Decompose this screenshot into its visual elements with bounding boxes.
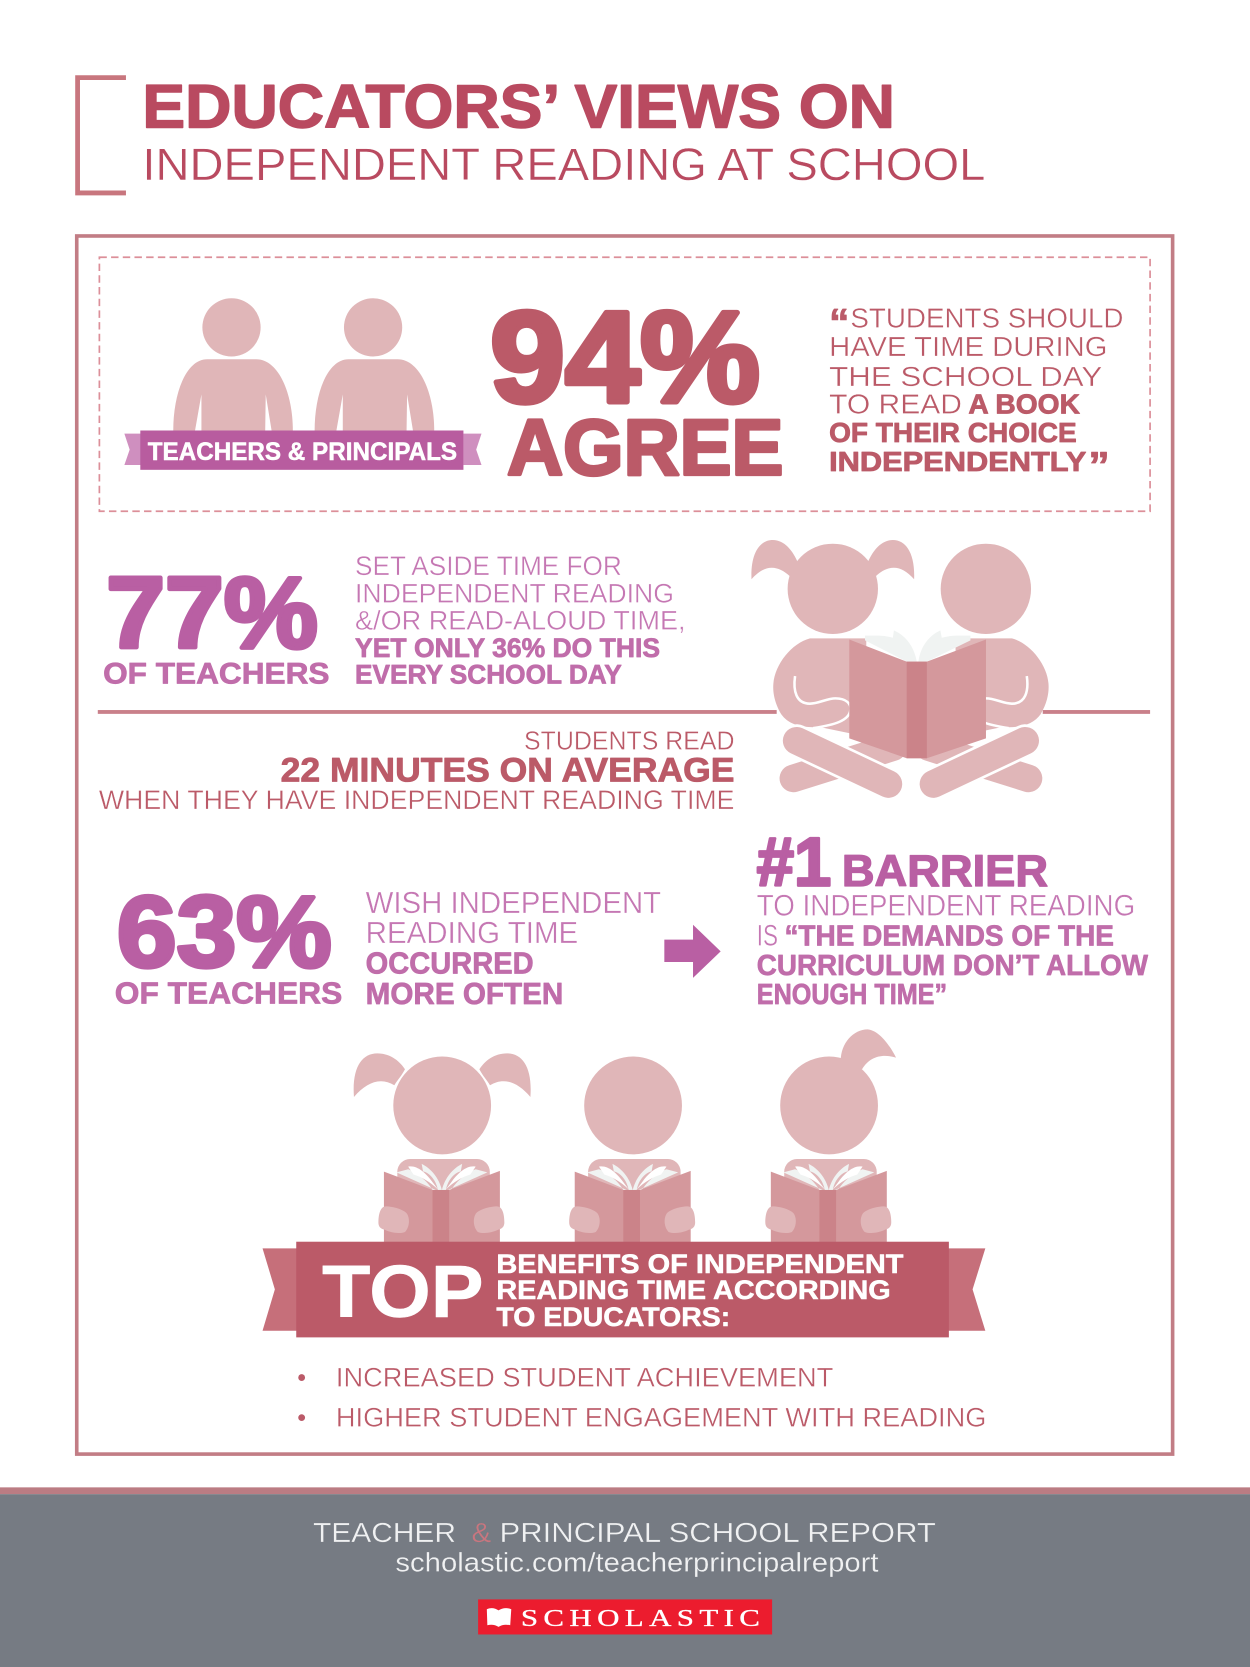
banner body [296, 1242, 949, 1337]
banner tails [263, 1248, 298, 1331]
banner text: BENEFITS OF INDEPENDENT [496, 1249, 903, 1279]
panel: number one barrier [757, 822, 1149, 1011]
list of benefits: HIGHER STUDENT ENGAGEMENT WITH READING [336, 1402, 986, 1432]
icon: open book [487, 1608, 511, 1627]
report url: scholastic.com/teacherprincipalreport [395, 1548, 879, 1578]
barrier description: IS [757, 920, 778, 953]
banner: top benefits [263, 1242, 985, 1337]
quote: THE SCHOOL DAY [829, 361, 1102, 392]
banner text: TO EDUCATORS: [496, 1302, 730, 1332]
footer background [0, 1494, 1250, 1667]
description: INDEPENDENT READING [355, 579, 674, 609]
illustration: two children sharing a book [751, 540, 1049, 784]
description [366, 885, 661, 1011]
description: WISH INDEPENDENT [366, 885, 661, 920]
dashed box [99, 257, 1150, 511]
banner: teachers and principals: TEACHERS & PRINCIPALS [148, 438, 457, 466]
stat: 94%: 94% [490, 286, 760, 430]
outer frame [77, 236, 1173, 1454]
child 3 [765, 1029, 896, 1244]
barrier description: “THE DEMANDS OF THE [784, 921, 1114, 953]
quote [829, 301, 1124, 487]
panel: 94% agree [99, 257, 1150, 511]
quote: STUDENTS SHOULD [850, 302, 1124, 333]
panel: 77% of teachers [103, 551, 686, 690]
barrier description: TO INDEPENDENT READING [757, 890, 1135, 923]
panel: 22 minutes [99, 727, 734, 815]
description [355, 551, 686, 689]
stat: agree: AGREE [507, 404, 783, 492]
title line 2: INDEPENDENT READING AT SCHOOL [142, 139, 985, 190]
quote: INDEPENDENTLY [829, 446, 1087, 477]
title block [78, 73, 985, 193]
footer strip [0, 1487, 1250, 1494]
report title [313, 1517, 936, 1548]
description: MORE OFTEN [366, 976, 563, 1011]
description: READING TIME [366, 915, 578, 950]
panel: 22 minutes: 22 MINUTES ON AVERAGE [281, 751, 734, 789]
illustration: three children reading [354, 1029, 896, 1244]
barrier: BARRIER [842, 847, 1048, 896]
quote: TO READ [829, 388, 962, 419]
description: OCCURRED [366, 946, 534, 981]
divider line [98, 710, 1150, 714]
quote: ” [1088, 444, 1110, 487]
of teachers: OF TEACHERS [103, 657, 330, 690]
arrow [664, 925, 721, 978]
report title: & [472, 1517, 491, 1548]
banner text [496, 1249, 903, 1332]
description: EVERY SCHOOL DAY [355, 659, 622, 689]
banner: teachers and principals [124, 430, 482, 470]
quote: HAVE TIME DURING [829, 331, 1108, 362]
panel: 22 minutes: WHEN THEY HAVE INDEPENDENT READING TIME [99, 785, 734, 815]
quote: “ [829, 301, 849, 344]
white gap around arms [777, 708, 1043, 716]
child 2 [569, 1057, 695, 1244]
footer [0, 1487, 1250, 1667]
quote: A BOOK [968, 388, 1081, 419]
list of benefits [298, 1363, 986, 1432]
report title: PRINCIPAL SCHOOL REPORT [500, 1517, 936, 1548]
panel: 63% of teachers [115, 877, 661, 1011]
logo: scholastic: SCHOLASTIC [521, 1605, 765, 1632]
description: YET ONLY 36% DO THIS [355, 633, 660, 663]
stat: 77%: 77% [106, 557, 318, 669]
barrier description [757, 890, 1149, 1011]
#1: #1 [757, 822, 831, 900]
description: &/OR READ-ALOUD TIME, [355, 605, 686, 635]
TOP: TOP [322, 1250, 484, 1333]
child 1 [354, 1053, 531, 1244]
title bracket [78, 78, 126, 193]
icon: two adults [173, 298, 434, 430]
barrier description: ENOUGH TIME” [757, 979, 947, 1011]
title line 1: EDUCATORS’ VIEWS ON [142, 73, 895, 142]
list of benefits: INCREASED STUDENT ACHIEVEMENT [336, 1363, 833, 1393]
quote: OF THEIR CHOICE [829, 417, 1077, 448]
barrier description: CURRICULUM DON’T ALLOW [757, 950, 1149, 982]
panel: 22 minutes: STUDENTS READ [524, 727, 734, 755]
banner text: READING TIME ACCORDING [496, 1275, 891, 1305]
description: SET ASIDE TIME FOR [355, 551, 622, 581]
report title: TEACHER [313, 1517, 456, 1548]
of teachers: OF TEACHERS [115, 975, 342, 1010]
logo: scholastic [478, 1599, 772, 1634]
stat: 63%: 63% [117, 877, 332, 989]
